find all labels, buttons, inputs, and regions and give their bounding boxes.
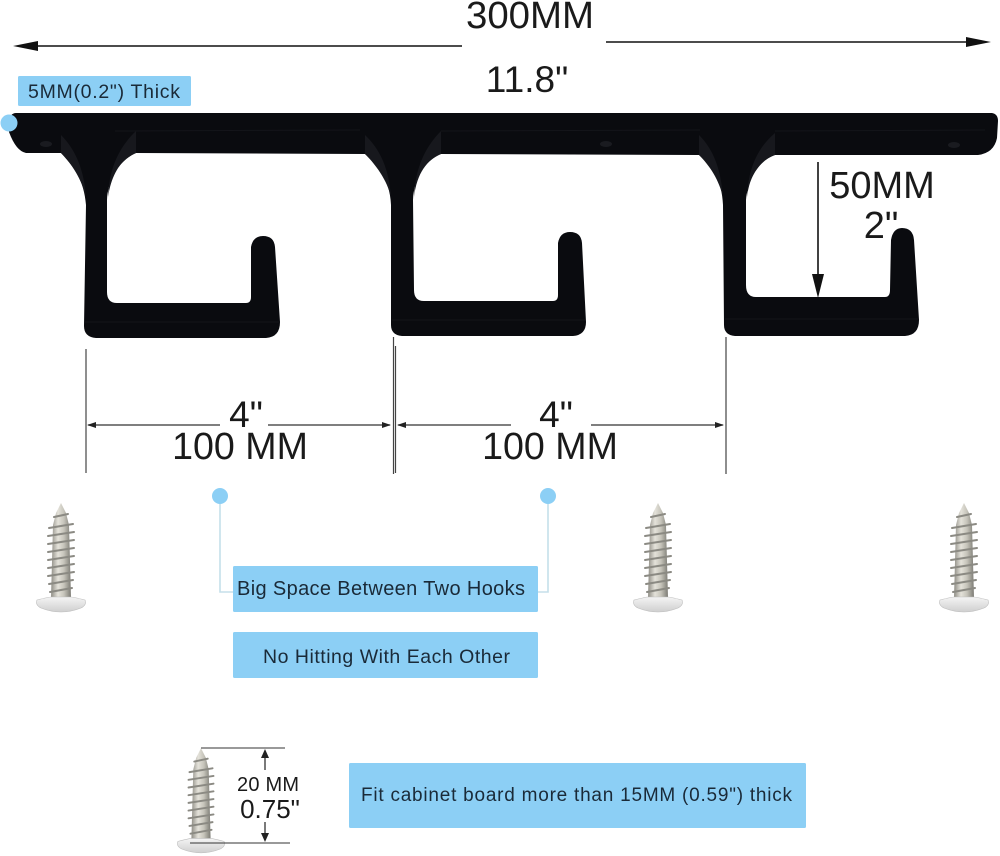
label: 0.75 inches: 0.75" <box>240 794 300 824</box>
label: 11.8 inches: 11.8" <box>486 59 568 100</box>
arrow: overall width left <box>13 41 462 51</box>
callout connectors <box>212 488 556 592</box>
arrow: right spacing <box>397 422 724 428</box>
label: right 100 MM: 100 MM <box>482 425 618 467</box>
hook depth dimension <box>812 162 935 298</box>
callout: thickness <box>0 76 191 132</box>
icon: screw 1 <box>36 503 86 612</box>
callout: big space: Big Space Between Two Hooks <box>237 578 525 600</box>
icon: screw 4 <box>177 748 225 853</box>
callout: thickness: 5MM(0.2") Thick <box>28 81 180 103</box>
callout: no hitting: No Hitting With Each Other <box>263 646 510 668</box>
label: left 100 MM: 100 MM <box>172 425 308 467</box>
callout: no hitting <box>233 632 538 678</box>
callout: cabinet board <box>349 763 806 828</box>
arrow: hook depth <box>812 162 824 298</box>
label: 50MM: 50MM <box>829 165 935 207</box>
label: 20 MM: 20 MM <box>237 774 299 796</box>
arrow: left spacing <box>87 422 391 428</box>
callout: big space <box>233 566 538 612</box>
arrow: overall width right <box>606 37 991 47</box>
hook rack <box>9 113 998 338</box>
label: left 4 inches: 4" <box>229 394 263 435</box>
hook spacing dimensions <box>86 337 726 474</box>
callout: cabinet board: Fit cabinet board more than 15MM (0.59") thick <box>361 785 792 806</box>
arrow: screw length <box>261 749 269 842</box>
label: 2 inches: 2" <box>864 205 898 247</box>
icon: screw 2 <box>634 503 682 612</box>
label: right 4 inches: 4" <box>539 394 573 435</box>
icon: screw 3 <box>940 503 988 612</box>
screw length figure <box>177 748 300 853</box>
overall width dimension <box>13 0 991 100</box>
